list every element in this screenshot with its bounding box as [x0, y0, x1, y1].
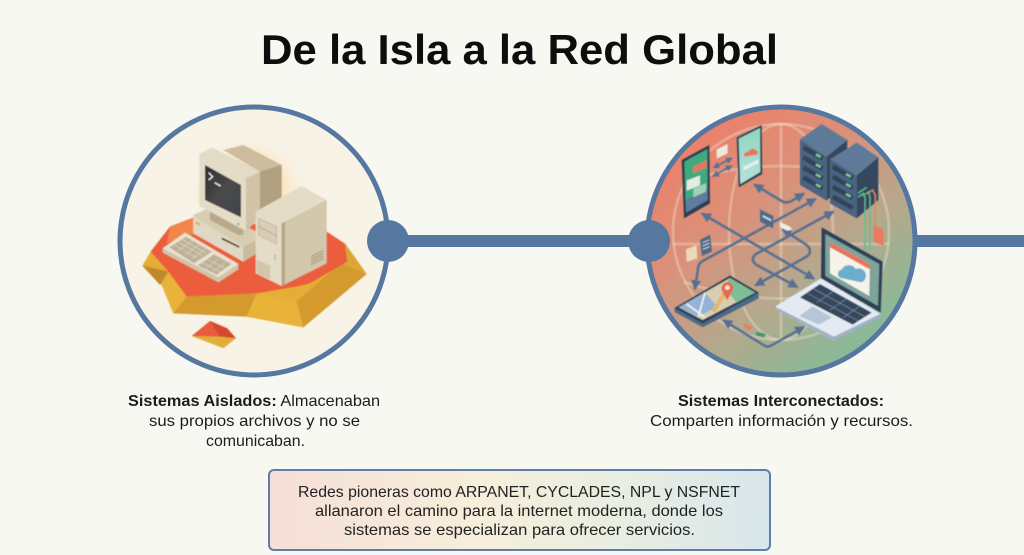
tower	[256, 186, 327, 286]
node: right connector	[628, 220, 670, 262]
callout: pioneering networks: sistemas se especializan para ofrecer servicios.	[344, 522, 695, 539]
caption: isolated systems: Sistemas Aislados: Almacenaban	[128, 393, 380, 410]
small rock	[192, 321, 236, 348]
globe grid	[673, 124, 889, 340]
illustration: connected devices	[675, 124, 884, 347]
phone with cloud	[737, 125, 762, 187]
servers	[800, 124, 878, 218]
callout: pioneering networks: allanaron el camino para la internet moderna, donde los	[315, 503, 723, 520]
island	[142, 218, 367, 327]
network circle border	[647, 107, 915, 375]
arrows between devices	[695, 158, 833, 347]
caption: isolated systems	[128, 393, 380, 450]
illustration: computer on island	[142, 145, 367, 348]
keyboard	[163, 233, 238, 282]
caption: isolated systems: sus propios archivos y no se	[149, 413, 360, 430]
callout: pioneering networks	[269, 470, 770, 550]
data packets	[686, 144, 884, 337]
caption: interconnected systems: Sistemas Interconectados:	[678, 393, 884, 410]
caption: interconnected systems	[650, 393, 913, 430]
caption: interconnected systems: Comparten información y recursos.	[650, 413, 913, 430]
map phone	[675, 276, 759, 327]
phone with chat	[682, 145, 710, 218]
monitor	[199, 145, 282, 235]
connector line: left to right node	[388, 235, 650, 247]
desktop base unit	[193, 207, 257, 262]
caption: isolated systems: comunicaban.	[206, 433, 305, 450]
panel: network circle	[647, 107, 915, 375]
laptop	[776, 227, 883, 341]
panel: isolated computer circle	[120, 107, 388, 375]
computer glow	[186, 134, 310, 246]
title: De la Isla a la Red Global	[261, 26, 778, 73]
callout: pioneering networks: Redes pioneras como ARPANET, CYCLADES, NPL y NSFNET	[298, 484, 740, 501]
connector line: exiting right	[914, 235, 1024, 247]
server cables	[858, 187, 875, 250]
node: left connector	[367, 220, 409, 262]
